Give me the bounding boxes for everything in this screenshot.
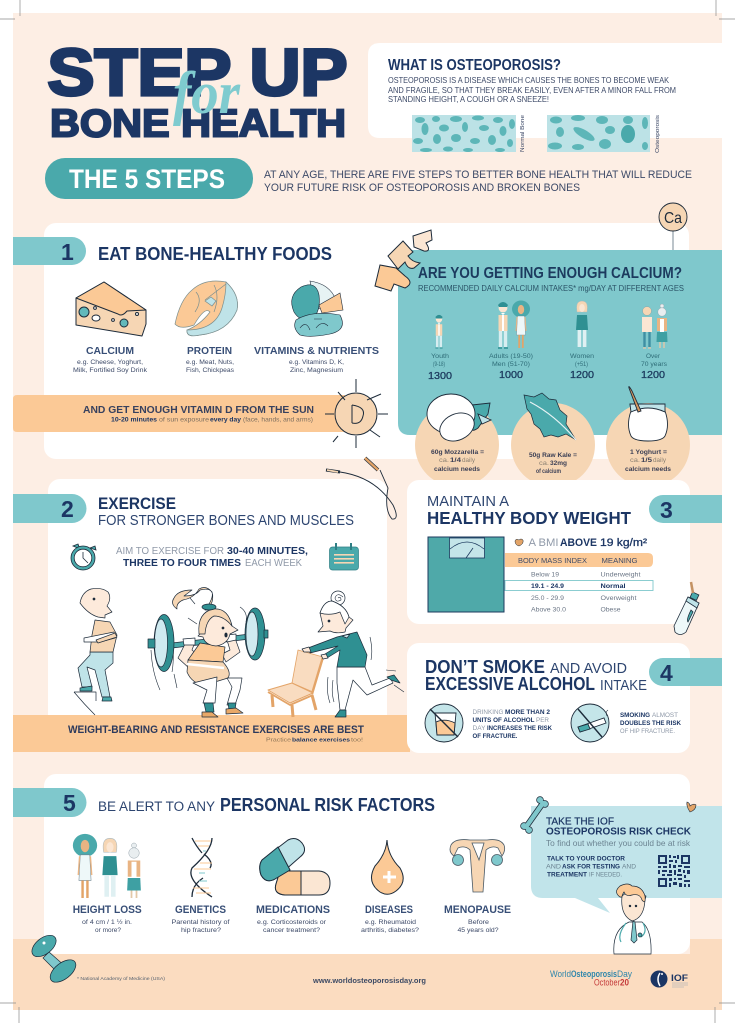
heading: personal risk factors: PERSONAL RISK FACTORS: [220, 795, 435, 815]
factor: menopause: MENOPAUSE: [444, 904, 511, 916]
bmi table: Overweight: [600, 595, 637, 602]
definition text: OSTEOPOROSIS IS A DISEASE WHICH CAUSES THE BONES TO BECOME WEAK: [388, 75, 669, 85]
text: alcohol: INCREASES THE RISK: [487, 725, 552, 732]
heading: healthy body weight: MAINTAIN A: [427, 494, 509, 510]
title: [48, 35, 348, 146]
bar: weight-bearing exercises: WEIGHT-BEARING AND RESISTANCE EXERCISES ARE BEST: [68, 724, 364, 736]
mozzarella caption: ca.: [439, 457, 449, 464]
yoghurt caption: daily: [653, 457, 667, 464]
bmi table: Underweight: [600, 572, 641, 578]
panel: what is osteoporosis: [368, 43, 722, 153]
bmi table: [505, 553, 653, 614]
kale caption: 32mg: [550, 460, 567, 467]
text: exercise frequency: EACH WEEK: [245, 558, 302, 569]
step 5 tab: [13, 788, 86, 817]
factor: height loss: [73, 834, 142, 934]
callout: risk check: TALK TO YOUR DOCTOR: [547, 856, 625, 862]
vitamin d bar: (face, hands, and arms): [243, 418, 313, 424]
step 4 tab: 4: [660, 660, 673, 686]
text: alcohol: UNITS OF ALCOHOL: [472, 717, 534, 724]
bar: weight-bearing exercises: Practice: [266, 738, 291, 744]
callout: risk check: TAKE THE IOF: [546, 816, 614, 828]
osteoporosis bone sample: [547, 115, 650, 152]
badge: the 5 steps: THE 5 STEPS: [69, 164, 225, 194]
icon: puzzle pieces: [375, 230, 432, 291]
callout: risk check: OSTEOPOROSIS RISK CHECK: [546, 826, 691, 838]
age group: youth: Youth: [431, 353, 449, 360]
title: BONE HEALTH: [50, 102, 346, 146]
figure: woman balancing at chair: [268, 591, 404, 717]
age group: adults: [489, 300, 533, 381]
panel: step 2 exercise: [13, 479, 410, 752]
heading: exercise: FOR STRONGER BONES AND MUSCLES: [98, 513, 354, 529]
text: alcohol: OF FRACTURE.: [472, 733, 518, 740]
vitamin d bar: 10-20 minutes: [111, 418, 158, 424]
heading: personal risk factors: [98, 795, 435, 815]
icon: vitamins and nutrients: [292, 281, 343, 336]
logo: world osteoporosis day: [550, 969, 632, 988]
intro text: YOUR FUTURE RISK OF OSTEOPOROSIS AND BROKEN BONES: [264, 182, 580, 194]
figure: doctor: [614, 884, 651, 954]
age group: over 70: [641, 304, 668, 381]
age group: over 70: 1200: [641, 369, 665, 381]
logo: world osteoporosis day: Day: [617, 969, 632, 979]
calcium: [73, 345, 148, 374]
age group: women: 1200: [570, 369, 594, 381]
heading: healthy body weight: [427, 494, 631, 528]
protein: e.g. Meat, Nuts,: [186, 359, 234, 366]
heading: personal risk factors: BE ALERT TO ANY: [98, 799, 215, 814]
logo: world osteoporosis day: 20: [620, 978, 629, 988]
vitamin d bar: [13, 395, 345, 432]
age group: women: (+51): [575, 361, 588, 368]
factor: genetics: Parental history of: [172, 919, 230, 926]
step 3 tab: [649, 495, 722, 523]
definition text: AND FRAGILE, SO THAT THEY BREAK EASILY, EVEN AFTER A MINOR FALL FROM: [388, 85, 676, 95]
factor: height loss: or more?: [95, 927, 121, 934]
age group: youth: (9-18): [433, 361, 445, 368]
age group: over 70: 70 years: [641, 361, 668, 368]
figure: man step-up: [74, 588, 117, 715]
badge: the 5 steps: [45, 158, 253, 199]
yoghurt caption: calcium needs: [625, 466, 671, 473]
step 3 tab: 3: [660, 497, 673, 523]
kale caption: [529, 452, 577, 475]
bmi target: A BMI: [528, 537, 558, 549]
icon: no smoking: [571, 704, 609, 742]
icon: no alcohol: [425, 704, 463, 742]
text: exercise frequency: [116, 546, 308, 569]
bar: weight-bearing exercises: balance exercises: [292, 738, 350, 744]
bmi target: [515, 537, 647, 549]
mozzarella caption: daily: [462, 457, 476, 464]
panel: step 3 body weight: [407, 480, 722, 624]
protein: PROTEIN: [187, 345, 232, 357]
panel: calcium intake: [398, 250, 722, 435]
vitamin d bar: AND GET ENOUGH VITAMIN D FROM THE SUN: [83, 405, 314, 416]
normal bone sample: [412, 115, 516, 152]
factor: menopause: Before: [468, 919, 489, 926]
calcium: Milk, Fortified Soy Drink: [73, 367, 148, 374]
vitamin d bar: of sun exposure: [159, 418, 210, 424]
protein: [186, 345, 235, 374]
text: smoking: ALMOST: [652, 712, 678, 719]
age group: adults: Adults (19-50): [489, 353, 533, 360]
icon: calcium element balloon: Ca: [664, 210, 682, 227]
callout: risk check: AND: [546, 864, 561, 870]
text: smoking: SMOKING: [620, 712, 650, 719]
heading: eat bone-healthy foods: EAT BONE-HEALTHY FOODS: [98, 244, 332, 264]
age group: adults: 1000: [499, 369, 523, 381]
calcium: CALCIUM: [86, 345, 134, 357]
text: exercise frequency: THREE TO FOUR TIMES: [123, 558, 241, 569]
icon: sun: [325, 379, 388, 448]
mozzarella caption: [431, 449, 484, 473]
definition text: [388, 75, 676, 104]
calcium food: kale: [511, 393, 595, 487]
bmi target: 19 kg/m²: [600, 537, 647, 549]
footer band: [13, 939, 722, 1010]
icon: bathroom scale: [428, 537, 504, 612]
protein: Fish, Chickpeas: [186, 367, 235, 374]
icon: calendar: [330, 543, 358, 570]
step 2 tab: [13, 494, 86, 523]
text: smoking: DOUBLES THE RISK: [620, 720, 681, 727]
callout: risk check: TREATMENT: [547, 872, 588, 878]
icon: water bottle: [674, 582, 699, 634]
callout: risk check: [531, 806, 722, 913]
website url: www.worldosteoporosisday.org: [312, 976, 426, 985]
age group: women: Women: [570, 353, 594, 360]
panel: step 4 smoke and alcohol: [407, 643, 722, 753]
text: alcohol: DAY: [472, 725, 486, 732]
age group: women: [570, 301, 594, 381]
step 5 tab: 5: [63, 790, 76, 816]
step 1 tab: [13, 237, 86, 265]
icon: bone: [521, 797, 548, 833]
bmi table: 19.1 - 24.9: [531, 583, 564, 590]
title: STEP UP: [48, 35, 348, 109]
heading: exercise: [98, 494, 354, 529]
icon: jump rope: [326, 458, 396, 519]
logo: world osteoporosis day: Osteoporosis: [571, 969, 617, 979]
heading: healthy body weight: HEALTHY BODY WEIGHT: [427, 508, 631, 528]
vitamin d bar: every day: [210, 418, 242, 424]
factor: diseases: DISEASES: [365, 904, 413, 916]
kale caption: 50g Raw Kale =: [529, 452, 577, 459]
label: osteoporosis: Osteoporosis: [655, 115, 661, 153]
kale caption: of calcium: [536, 468, 561, 475]
factor: diseases: arthritis, diabetes?: [361, 927, 419, 934]
bmi target: ABOVE: [560, 537, 597, 549]
logo: world osteoporosis day: October: [594, 978, 620, 988]
mozzarella caption: 1/4: [450, 457, 462, 464]
factor: genetics: hip fracture?: [181, 927, 221, 934]
factor: menopause: [444, 840, 511, 934]
yoghurt caption: [625, 449, 671, 473]
bmi table: 25.0 - 29.9: [531, 595, 564, 602]
text: exercise frequency: AIM TO EXERCISE FOR: [116, 546, 224, 557]
callout: risk check: To find out whether you could be at risk: [546, 838, 691, 848]
icon: stopwatch: [71, 544, 96, 570]
bmi table: BODY MASS INDEX: [518, 556, 587, 565]
logo: world osteoporosis day: World: [550, 969, 571, 979]
factor: medications: MEDICATIONS: [256, 904, 330, 916]
text: exercise frequency: 30-40 MINUTES,: [227, 546, 308, 557]
text: smoking: OF HIP FRACTURE.: [620, 728, 675, 735]
kale caption: ca.: [539, 460, 549, 467]
icon: heart: [687, 802, 696, 812]
calcium: e.g. Cheese, Yoghurt,: [77, 359, 143, 366]
title: for: [173, 60, 241, 126]
bmi table: Above 30.0: [531, 606, 566, 614]
yoghurt caption: ca.: [630, 457, 640, 464]
label: normal bone: Normal Bone: [520, 115, 526, 152]
heading: are you getting enough calcium: ARE YOU GETTING ENOUGH CALCIUM?: [418, 265, 682, 282]
vitamins: VITAMINS & NUTRIENTS: [254, 345, 379, 357]
bmi table: Below 19: [531, 572, 559, 578]
text: smoking: [620, 712, 681, 735]
logo: iof: [650, 970, 688, 988]
factor: medications: e.g. Corticosteroids or: [257, 919, 327, 926]
factor: medications: [256, 839, 330, 934]
mozzarella caption: calcium needs: [434, 466, 480, 473]
heading: what is osteoporosis: WHAT IS OSTEOPOROSIS?: [388, 57, 561, 74]
step 4 tab: [649, 658, 722, 686]
age group: over 70: Over: [646, 353, 661, 360]
icon: dumbbell: [28, 931, 80, 987]
factor: height loss: HEIGHT LOSS: [73, 904, 142, 916]
bmi table: Normal: [600, 583, 626, 590]
heading: don't smoke: EXCESSIVE ALCOHOL: [425, 674, 595, 694]
factor: menopause: 45 years old?: [458, 927, 499, 934]
qr code: [658, 855, 690, 887]
yoghurt caption: 1/5: [641, 457, 653, 464]
step 2 tab: 2: [61, 496, 74, 522]
bmi table: MEANING: [602, 556, 638, 565]
text: alcohol: PER: [536, 717, 549, 724]
heading: don't smoke: AND AVOID: [550, 661, 627, 677]
text: alcohol: MORE THAN 2: [505, 709, 550, 716]
mozzarella caption: 60g Mozzarella =: [431, 449, 484, 456]
callout: risk check: ASK FOR TESTING: [562, 864, 620, 870]
mozzarella illustration: [427, 394, 491, 446]
logo: iof: IOF: [671, 973, 688, 984]
text: alcohol: DRINKING: [472, 709, 504, 716]
intro text: AT ANY AGE, THERE ARE FIVE STEPS TO BETTER BONE HEALTH THAT WILL REDUCE: [264, 169, 692, 181]
definition text: STANDING HEIGHT, A COUGH OR A SNEEZE!: [388, 94, 549, 104]
bmi table: Obese: [600, 606, 621, 614]
calcium subheading: RECOMMENDED DAILY CALCIUM INTAKES* mg/DAY AT DIFFERENT AGES: [418, 283, 684, 293]
icon: calcium element balloon: [659, 203, 687, 250]
factor: genetics: [172, 838, 230, 934]
yoghurt illustration: [628, 387, 668, 441]
icon: cheese: [76, 282, 146, 336]
footnote: * National Academy of Medicine (USA): [77, 976, 166, 981]
factor: diseases: [361, 840, 419, 934]
age group: adults: Men (51-70): [492, 361, 530, 368]
yoghurt caption: 1 Yoghurt =: [630, 449, 667, 456]
heading: exercise: EXERCISE: [98, 494, 176, 513]
heading: don't smoke: INTAKE: [600, 678, 647, 694]
heading: don't smoke: DON’T SMOKE: [425, 657, 545, 677]
text: alcohol: [472, 709, 552, 740]
factor: diseases: e.g. Rheumatoid: [365, 919, 416, 926]
kale illustration: [524, 393, 576, 440]
factor: height loss: of 4 cm / 1 ½ in.: [82, 918, 132, 926]
bar: weight-bearing exercises: [13, 715, 410, 752]
factor: genetics: GENETICS: [175, 904, 226, 916]
factor: medications: cancer treatment?: [263, 927, 320, 934]
figure: woman lifting barbell: [148, 588, 268, 717]
calcium food: mozzarella: [415, 394, 499, 487]
age group: youth: [428, 315, 452, 382]
panel: step 1 foods: [13, 223, 689, 459]
intro text: [264, 169, 692, 194]
panel: step 5 risk factors: [13, 774, 690, 954]
age group: youth: 1300: [428, 370, 452, 382]
step 1 tab: 1: [61, 239, 74, 265]
vitamins: Zinc, Magnesium: [290, 367, 343, 374]
bar: weight-bearing exercises: too!: [351, 738, 363, 744]
icon: salmon: [175, 281, 238, 336]
callout: risk check: IF NEEDED.: [589, 872, 622, 878]
callout: risk check: AND: [622, 864, 636, 870]
vitamins: e.g. Vitamins D, K,: [289, 359, 344, 366]
food labels: [73, 345, 379, 374]
heading: don't smoke: [425, 657, 647, 694]
calcium food: yoghurt: [606, 387, 690, 487]
vitamins: [254, 345, 379, 374]
